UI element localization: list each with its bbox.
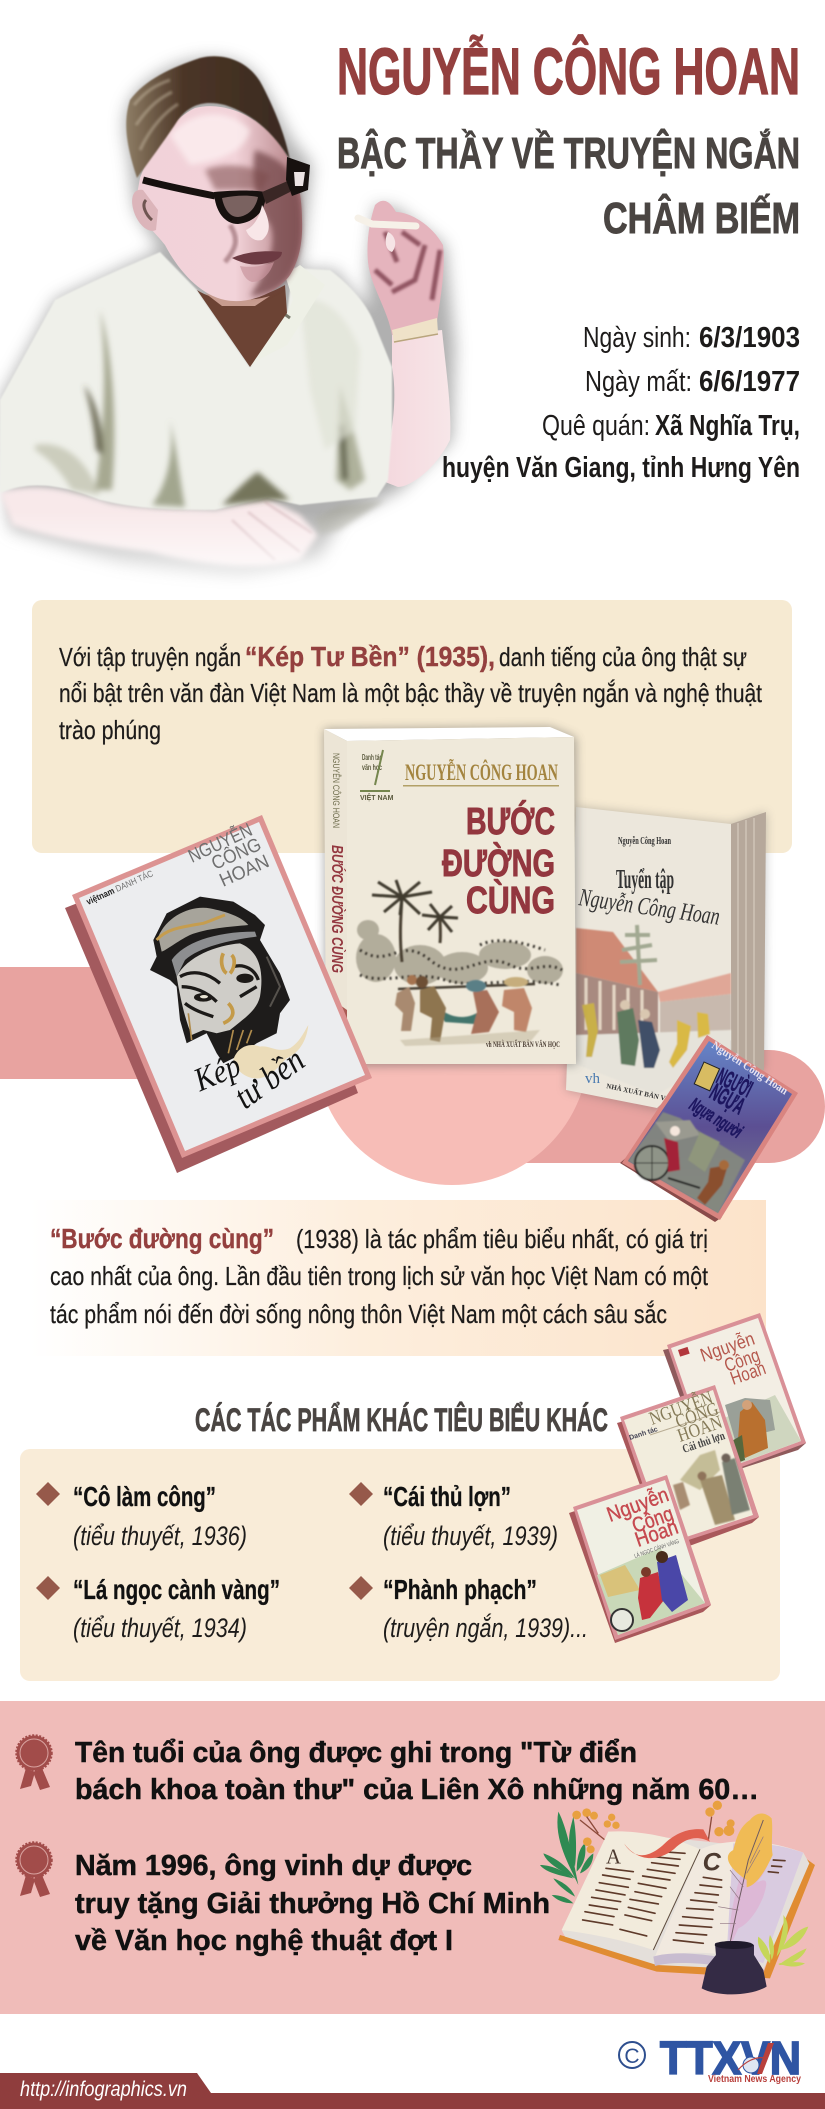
cover text: HOAN bbox=[216, 851, 273, 892]
cover text: việtnam DANH TÁC bbox=[85, 868, 155, 907]
mask illustration bbox=[150, 897, 312, 1116]
biography details: 6/3/1903 bbox=[699, 322, 800, 354]
TTXVN logo: Vietnam News Agency bbox=[708, 2074, 801, 2085]
book cover: Bước đường cùng bbox=[324, 727, 577, 1066]
face bbox=[135, 106, 302, 301]
intro text: danh tiếng của ông thật sự bbox=[499, 642, 747, 672]
panel: Bước đường cùng description bbox=[30, 1200, 766, 1356]
panel: Kép Tư Bền intro bbox=[32, 600, 792, 853]
book cover: Người ngựa ngựa người bbox=[620, 1035, 798, 1222]
lower arm and hand bbox=[0, 487, 318, 566]
berries bbox=[572, 1801, 735, 1853]
hair bbox=[126, 56, 290, 178]
cover title: Danh tác bbox=[362, 753, 382, 762]
item: Lá ngọc cành vàng: “Lá ngọc cành vàng” bbox=[73, 1574, 280, 1605]
salmon circle bbox=[315, 911, 589, 1185]
cover text: Nguyễn Công Hoan bbox=[709, 1039, 791, 1098]
panel: honours bbox=[0, 1701, 825, 2014]
book letters: A bbox=[606, 1846, 621, 1868]
ribbon bookmark bbox=[624, 1829, 710, 1858]
illustration: palm trees and villagers bbox=[356, 880, 563, 1049]
book: top cover with mandarin bbox=[663, 1313, 806, 1485]
description text: (1938) là tác phẩm tiêu biểu nhất, có giá trị bbox=[296, 1224, 708, 1254]
book text bbox=[576, 836, 722, 1108]
website url: http://infographics.vn bbox=[20, 2078, 187, 2101]
subtitle bbox=[337, 128, 800, 243]
icon: medal bbox=[16, 1736, 52, 1790]
biography details bbox=[442, 322, 800, 484]
book base bbox=[558, 1857, 815, 1978]
book text: Nguyễn Công Hoan bbox=[576, 884, 722, 931]
small leaves bbox=[758, 1915, 808, 1966]
text lines bbox=[583, 1852, 785, 1943]
book pages bbox=[562, 1832, 809, 1970]
handwritten book title bbox=[188, 1040, 312, 1116]
collar bbox=[250, 265, 314, 366]
description text bbox=[50, 1223, 709, 1329]
cover text: NGỰA bbox=[705, 1079, 750, 1120]
quill feather bbox=[730, 1813, 772, 1943]
description text: tác phẩm nói đến đời sống nông thôn Việt Nam một cách sâu sắc bbox=[50, 1299, 667, 1329]
cover title: ĐƯỜNG bbox=[442, 841, 555, 885]
cover text: Ngựa người bbox=[685, 1094, 746, 1143]
illustration: open book, quill and inkwell: C bbox=[703, 1849, 722, 1877]
copyright mark: C bbox=[624, 2045, 640, 2068]
cover title bbox=[360, 750, 559, 922]
biography details: Ngày sinh: bbox=[583, 322, 691, 354]
footer bar bbox=[0, 2073, 825, 2109]
honour text 2: truy tặng Giải thưởng Hồ Chí Minh bbox=[75, 1888, 550, 1920]
raised hand with cigarette bbox=[367, 201, 444, 335]
halo bbox=[0, 58, 455, 585]
book: Cái thủ lợn bbox=[617, 1385, 759, 1553]
book: Lá ngọc cành vàng: Nguyễn bbox=[604, 1483, 672, 1527]
illustration: colonial building and people bbox=[575, 925, 731, 1095]
book: top cover with mandarin: Hoan bbox=[728, 1358, 769, 1390]
item: Lá ngọc cành vàng: (tiểu thuyết, 1934) bbox=[73, 1613, 247, 1643]
item: Lá ngọc cành vàng bbox=[36, 1574, 280, 1643]
handwritten book title: Kép bbox=[188, 1047, 246, 1099]
cover title: văn học bbox=[362, 763, 382, 772]
item: Cái thủ lợn bbox=[349, 1481, 558, 1551]
book: Lá ngọc cành vàng bbox=[569, 1475, 711, 1643]
intro text: “Kép Tư Bền” (1935), bbox=[245, 641, 495, 672]
panel: other works list bbox=[20, 1449, 780, 1681]
book text: vh bbox=[585, 1071, 600, 1087]
item: Cái thủ lợn: “Cái thủ lợn” bbox=[383, 1481, 511, 1512]
TTXVN logo bbox=[619, 2032, 801, 2085]
glasses bbox=[143, 157, 310, 224]
globe emblem on V bbox=[738, 2043, 774, 2074]
spine text: NGUYỄN CÔNG HOAN bbox=[331, 753, 342, 828]
honour text 1 bbox=[75, 1737, 759, 1806]
description text: “Bước đường cùng” bbox=[50, 1223, 274, 1254]
illustration: palm trees and villagers: vh NHÀ XUẤT BẢN VĂN HỌC bbox=[486, 1039, 560, 1049]
spine text bbox=[328, 753, 347, 973]
pink background band right bbox=[480, 1050, 825, 1163]
book: Cái thủ lợn: Danh tác bbox=[628, 1426, 659, 1442]
honour text 1: bách khoa toàn thư" của Liên Xô những năm 60… bbox=[75, 1774, 759, 1806]
book: Cái thủ lợn: CÔNG bbox=[672, 1398, 721, 1433]
book: top cover with mandarin: Nguyễn bbox=[697, 1328, 758, 1367]
item: Cô làm công bbox=[36, 1481, 247, 1551]
section heading: other works: CÁC TÁC PHẨM KHÁC TIÊU BIỂU KHÁC bbox=[195, 1402, 608, 1438]
cover text bbox=[85, 819, 273, 907]
handwritten book title: tư bền bbox=[227, 1040, 312, 1116]
shirt bbox=[0, 252, 392, 510]
book: Lá ngọc cành vàng: Hoan bbox=[632, 1516, 681, 1552]
biography details: Ngày mất: bbox=[585, 366, 692, 398]
inkwell bbox=[702, 1941, 767, 1994]
smoke cloud bbox=[233, 1025, 308, 1078]
wordmark: TTXVN bbox=[660, 2032, 801, 2084]
illustration: open book, quill and inkwell bbox=[540, 1801, 815, 1994]
shirt folds bbox=[35, 299, 365, 507]
book text: NHÀ XUẤT BẢN VĂN HỌC bbox=[606, 1082, 693, 1108]
portrait of Nguyễn Công Hoan bbox=[0, 56, 455, 585]
cover title: VIỆT NAM bbox=[360, 793, 394, 802]
book: top cover with mandarin: Công bbox=[722, 1345, 763, 1377]
book: Cái thủ lợn: NGUYỄN bbox=[646, 1386, 716, 1430]
book: Lá ngọc cành vàng: LÁ NGỌC CÀNH VÀNG bbox=[633, 1538, 680, 1560]
book: Cái thủ lợn: HOAN bbox=[675, 1412, 725, 1447]
biography details: 6/6/1977 bbox=[699, 366, 800, 398]
cover text: NGƯỜI bbox=[712, 1062, 757, 1103]
item: Phành phạch: “Phành phạch” bbox=[383, 1574, 537, 1605]
neck bbox=[197, 285, 287, 367]
honour text 1: Tên tuổi của ông được ghi trong "Từ điển bbox=[75, 1737, 637, 1769]
intro text: Với tập truyện ngắn bbox=[59, 642, 241, 672]
honour text 2: về Văn học nghệ thuật đợt I bbox=[75, 1925, 453, 1957]
book: Cái thủ lợn: Cái thủ lợn bbox=[680, 1428, 727, 1456]
right forearm bbox=[380, 330, 450, 487]
item: Phành phạch bbox=[349, 1574, 588, 1643]
cover title: BƯỚC bbox=[466, 799, 555, 843]
icon: medal bbox=[16, 1842, 52, 1897]
cover text bbox=[685, 1039, 791, 1143]
cover title: NGUYỄN CÔNG HOAN bbox=[405, 758, 558, 785]
intro text: trào phúng bbox=[59, 715, 161, 745]
spine text: BƯỚC ĐƯỜNG CÙNG bbox=[328, 845, 347, 973]
book stack: other works covers bbox=[569, 1313, 806, 1643]
honour text 2 bbox=[75, 1850, 550, 1957]
book: Lá ngọc cành vàng: Công bbox=[629, 1502, 676, 1538]
item: Phành phạch: (truyện ngắn, 1939)... bbox=[383, 1612, 588, 1643]
intro text bbox=[59, 641, 763, 745]
book text: Nguyễn Công Hoan bbox=[618, 836, 671, 847]
book cover: Kép Tư Bền bbox=[65, 815, 372, 1173]
pink background band left bbox=[0, 967, 400, 1079]
book text: Tuyển tập bbox=[616, 864, 674, 894]
nose and mouth bbox=[246, 205, 269, 240]
copyright mark bbox=[619, 2042, 645, 2068]
cover title: CÙNG bbox=[466, 878, 555, 922]
ear bbox=[132, 190, 158, 231]
cover text: CÔNG bbox=[208, 833, 265, 875]
title bbox=[337, 34, 800, 243]
biography details: Quê quán: bbox=[542, 410, 650, 442]
cover text: NGUYỄN bbox=[185, 819, 256, 868]
item: Cô làm công: “Cô làm công” bbox=[73, 1481, 216, 1512]
cover art: rickshaw scene bbox=[628, 1112, 745, 1213]
honour text 2: Năm 1996, ông vinh dự được bbox=[75, 1850, 472, 1882]
book cover: Tuyển tập Nguyễn Công Hoan bbox=[566, 807, 766, 1110]
leaves left bbox=[540, 1812, 593, 1903]
item: Cô làm công: (tiểu thuyết, 1936) bbox=[73, 1521, 247, 1551]
item: Cái thủ lợn: (tiểu thuyết, 1939) bbox=[383, 1521, 558, 1551]
